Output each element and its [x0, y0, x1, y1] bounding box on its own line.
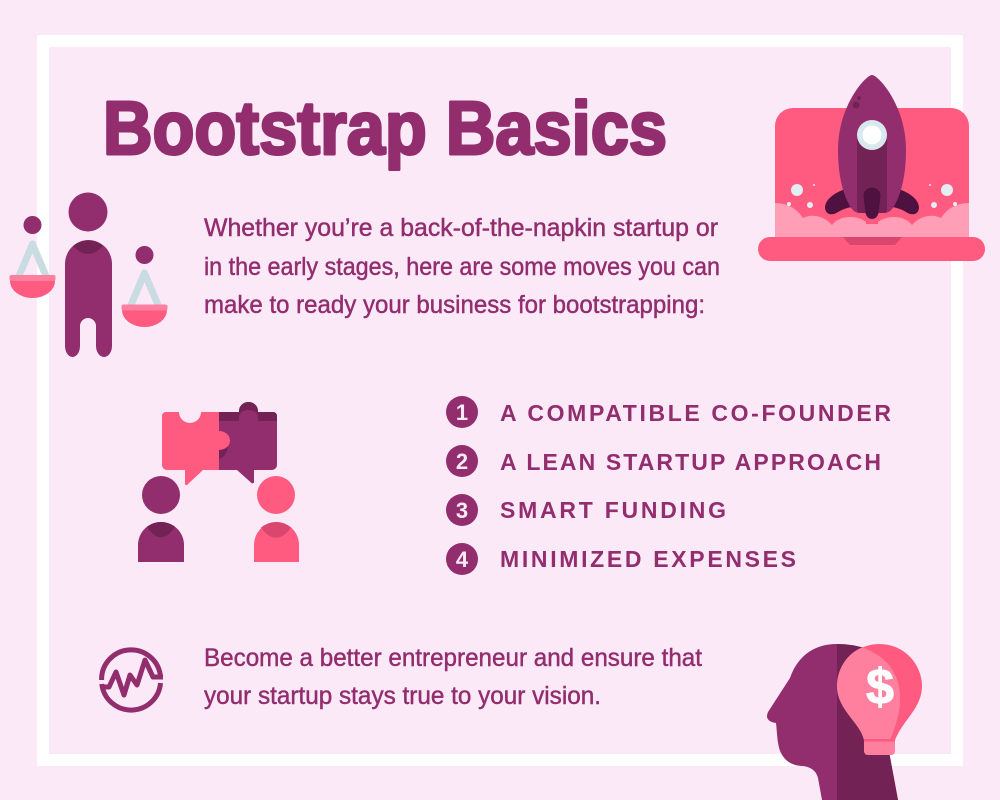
item 4: 4: [456, 547, 469, 572]
icon: rocket launching from laptop: [758, 75, 985, 261]
intro text: [204, 214, 720, 319]
title: Bootstrap Basics: [103, 86, 667, 170]
item 2: 2: [456, 449, 468, 474]
closing text: your startup stays true to your vision.: [204, 682, 601, 710]
item 3: 3: [456, 498, 468, 523]
item 1: 1: [456, 400, 468, 425]
item 4: [446, 543, 796, 575]
intro text: make to ready your business for bootstrapping:: [204, 291, 705, 319]
light bulb: [837, 644, 922, 755]
intro text: Whether you’re a back-of-the-napkin startup or: [204, 214, 718, 242]
closing text: [204, 644, 702, 710]
intro text: in the early stages, here are some moves you can: [204, 253, 720, 281]
item 2: A LEAN STARTUP APPROACH: [500, 449, 881, 475]
left scale: [10, 216, 56, 298]
item 3: [446, 494, 726, 526]
item 4: MINIMIZED EXPENSES: [500, 546, 796, 572]
icon: person balancing scales: [10, 192, 168, 357]
icon: pulse circle: [101, 650, 163, 710]
dark puzzle bubble: [219, 402, 277, 483]
icon: head with dollar light bulb: [767, 644, 922, 800]
item 1: A COMPATIBLE CO-FOUNDER: [500, 400, 891, 426]
numbered list: [446, 396, 891, 575]
pink puzzle bubble: [162, 412, 230, 485]
item 3: SMART FUNDING: [500, 497, 726, 523]
left person: [142, 476, 180, 514]
light bulb: $: [866, 659, 894, 715]
icon: two people with puzzle speech bubbles: [138, 402, 299, 562]
right scale: [122, 246, 168, 327]
right person: [257, 476, 295, 514]
closing text: Become a better entrepreneur and ensure that: [204, 644, 702, 672]
